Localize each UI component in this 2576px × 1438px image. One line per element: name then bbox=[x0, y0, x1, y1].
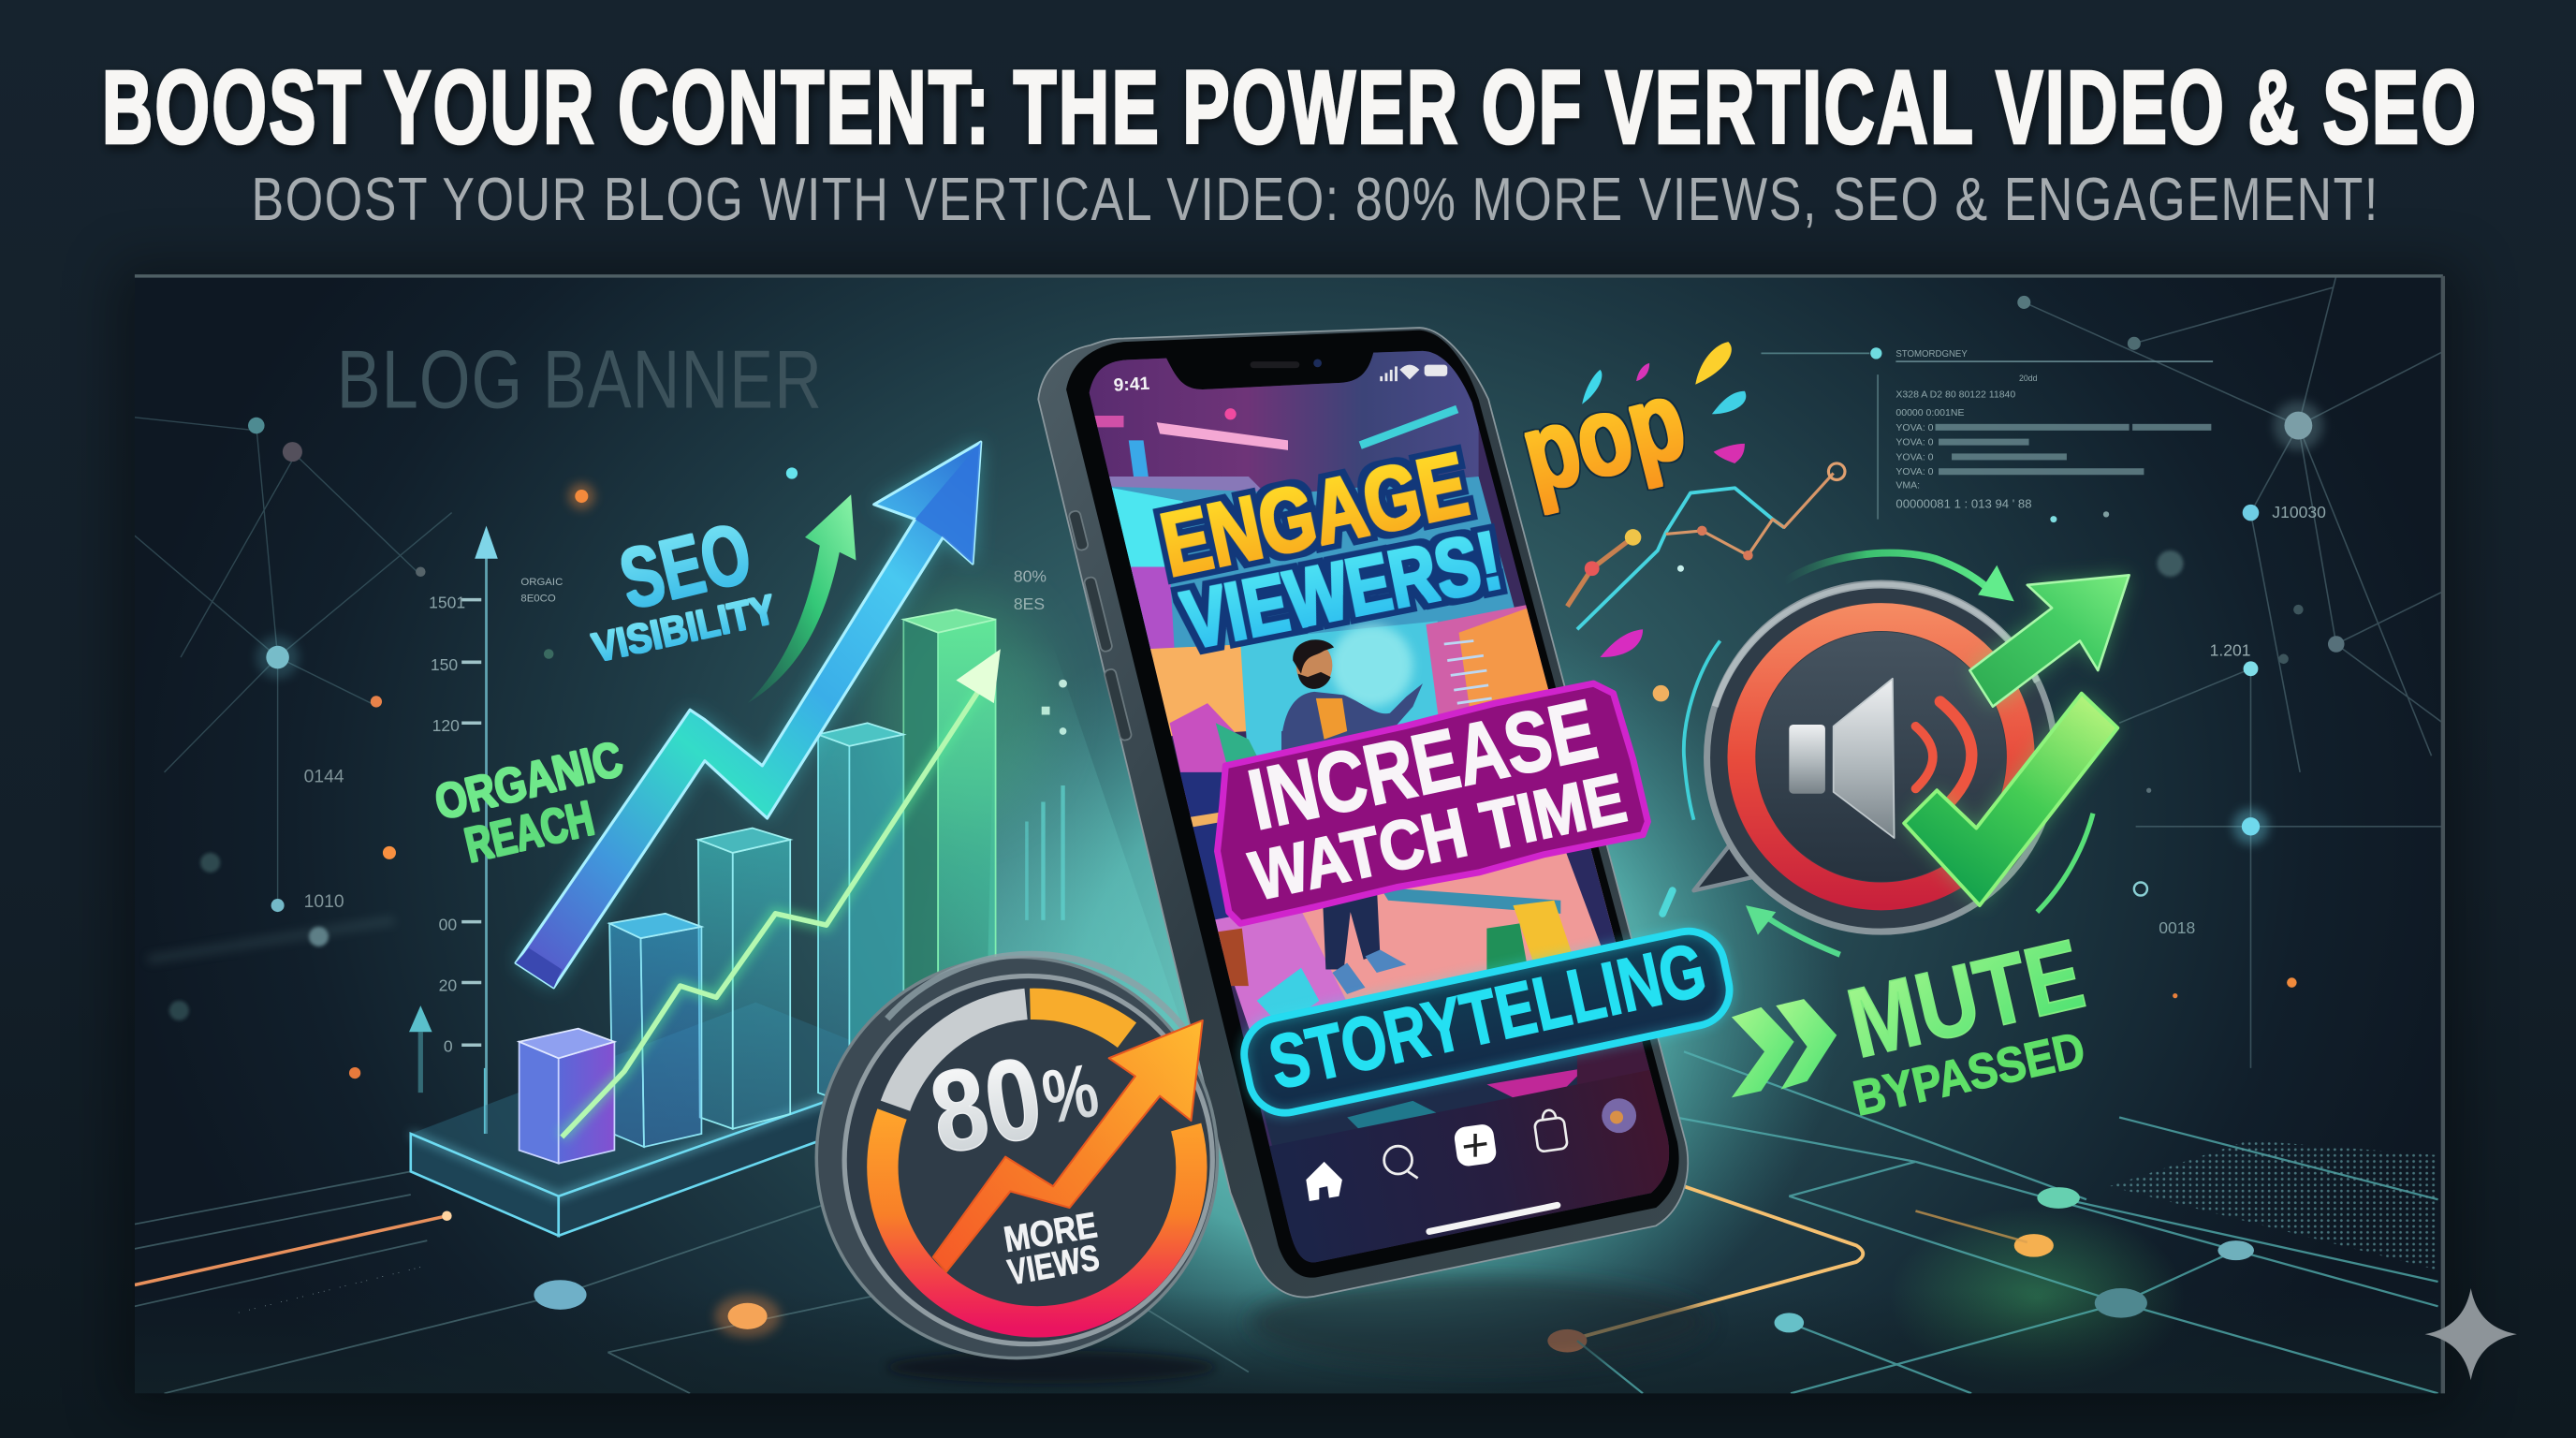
terminal data readout: STOMORDGNEY bbox=[1895, 349, 1968, 360]
subtitle: BOOST YOUR BLOG WITH VERTICAL VIDEO: 80% MORE VIEWS, SEO & ENGAGEMENT! bbox=[252, 167, 2378, 234]
terminal data readout bbox=[1761, 347, 2213, 522]
room background bbox=[1084, 348, 1692, 1183]
speaker camera bbox=[1251, 359, 1322, 368]
chart axis with tick labels: 0 bbox=[444, 1036, 453, 1055]
storytelling pill bbox=[1237, 925, 1736, 1120]
phone reflection bbox=[1249, 1277, 1708, 1369]
bar 2 blue bbox=[609, 914, 701, 1147]
chart axis with tick labels: 1010 bbox=[304, 892, 344, 912]
right network graphic: J10030 bbox=[2272, 503, 2326, 521]
right network graphic: 1.201 bbox=[2210, 640, 2251, 659]
status icons bbox=[1380, 365, 1447, 381]
chart axis with tick labels: 150 bbox=[431, 655, 458, 674]
heading: blog banner: BLOG BANNER bbox=[337, 333, 822, 425]
80 percent badge: 80 bbox=[922, 1034, 1051, 1179]
mini line chart bbox=[1567, 463, 1845, 629]
presenter figure bbox=[1281, 639, 1423, 994]
circuit floor lines: · ·· ·· ·· ·· ···· ·· ··· ·· ·· ··· bbox=[237, 1264, 422, 1316]
pop word: pop bbox=[1510, 357, 1696, 517]
80 percent badge bbox=[816, 954, 1218, 1384]
home indicator bbox=[1429, 1205, 1558, 1231]
side buttons bbox=[1068, 510, 1133, 741]
engage viewers text: ENGAGE bbox=[1153, 434, 1476, 596]
terminal data readout: 20dd bbox=[2019, 374, 2038, 383]
terminal data readout: YOVA: 0 bbox=[1895, 437, 1934, 448]
increase watch time badge bbox=[1218, 682, 1647, 923]
right network graphic bbox=[2017, 276, 2443, 1068]
green up arrow bbox=[1969, 575, 2130, 707]
search icon bbox=[1384, 1146, 1418, 1178]
mute speaker icon bbox=[1694, 583, 2056, 932]
increase watch time badge: INCREASE bbox=[1241, 682, 1604, 848]
label: SEO visibility: VISIBILITY bbox=[589, 586, 780, 671]
chart axis with tick labels: 1501 bbox=[429, 593, 465, 611]
chart axis with tick labels: ORGAIC bbox=[520, 577, 563, 588]
bar chart on glass platform bbox=[411, 592, 1051, 1236]
terminal data readout: YOVA: 0 bbox=[1895, 422, 1934, 433]
chart axis with tick labels: 8E0CO bbox=[520, 593, 556, 604]
bag icon bbox=[1534, 1110, 1568, 1152]
terminal data readout: 00000 0:001NE bbox=[1895, 407, 1964, 418]
mute bypassed label bbox=[1732, 919, 2093, 1126]
terminal data readout: YOVA: 0 bbox=[1895, 466, 1934, 477]
label: SEO visibility: SEO bbox=[611, 505, 760, 628]
increase watch time badge: WATCH TIME bbox=[1243, 758, 1632, 915]
title: BOOST YOUR CONTENT: THE POWER OF VERTICAL VIDEO & SEO bbox=[102, 50, 2476, 166]
terminal data readout: YOVA: 0 bbox=[1895, 451, 1934, 462]
label: organic reach bbox=[436, 741, 623, 863]
circuit floor lines bbox=[135, 1051, 2448, 1393]
label: SEO visibility bbox=[590, 525, 771, 661]
80 percent badge: MORE bbox=[1001, 1205, 1100, 1260]
cycle arrows bbox=[1662, 553, 2093, 955]
terminal data readout: X328 A D2 80 80122 11840 bbox=[1895, 389, 2015, 401]
profile avatar bbox=[1602, 1098, 1636, 1133]
chart axis with tick labels: 00 bbox=[439, 915, 457, 933]
chevrons bbox=[1732, 999, 1837, 1097]
label: organic reach: ORGANIC bbox=[430, 731, 628, 830]
bar 5 green bbox=[871, 592, 1051, 1051]
right network graphic: 0018 bbox=[2159, 918, 2195, 937]
storytelling pill: STORYTELLING bbox=[1262, 928, 1713, 1106]
terminal data readout: 00000081 1 : 013 94 ' 88 bbox=[1895, 496, 2032, 510]
phone bbox=[1038, 328, 1736, 1314]
chart axis with tick labels: 8ES bbox=[1014, 594, 1045, 613]
big blue growth arrow bbox=[516, 442, 981, 988]
speaker cone bbox=[1789, 679, 1895, 838]
home icon bbox=[1306, 1162, 1342, 1201]
icon: sparkle star bbox=[2425, 1288, 2517, 1380]
terminal data readout: VMA: bbox=[1895, 479, 1920, 491]
chart axis with tick labels: 20 bbox=[439, 976, 457, 994]
mute bypassed label: BYPASSED bbox=[1849, 1022, 2090, 1126]
chart axis with tick labels: 0144 bbox=[304, 767, 344, 786]
80 percent badge: % bbox=[1036, 1049, 1105, 1140]
chart axis with tick labels: 120 bbox=[432, 716, 460, 735]
pop splash marks bbox=[1582, 342, 1746, 701]
80 percent badge: VIEWS bbox=[1004, 1238, 1103, 1293]
bar 1 purple bbox=[520, 1029, 614, 1164]
green small arrow bbox=[748, 494, 856, 703]
green check mark bbox=[1904, 694, 2117, 905]
engage viewers text: VIEWERS! bbox=[1175, 514, 1509, 667]
orange zigzag arrow bbox=[933, 1020, 1203, 1271]
panel: blog banner bbox=[135, 276, 2448, 1393]
mute bypassed label: MUTE bbox=[1838, 919, 2093, 1079]
status time: 9:41 bbox=[1113, 374, 1150, 396]
chart axis with tick labels: 80% bbox=[1014, 566, 1046, 585]
chart axis with tick labels bbox=[304, 526, 1063, 1134]
engage viewers text bbox=[1153, 434, 1509, 667]
bar 3 teal bbox=[698, 829, 790, 1129]
red sound waves bbox=[1915, 701, 1971, 801]
left network graphic bbox=[135, 418, 1067, 1078]
add icon bbox=[1453, 1123, 1498, 1167]
nav icons bbox=[1306, 1098, 1636, 1201]
progress ring bbox=[883, 1004, 1192, 1322]
nav bar bbox=[1265, 1064, 1692, 1314]
bar 4 teal bbox=[818, 723, 903, 1104]
screen bbox=[1051, 329, 1708, 1314]
label: organic reach: REACH bbox=[460, 790, 599, 873]
green bright trend line bbox=[562, 649, 1001, 1137]
panel border bbox=[135, 276, 2443, 1393]
